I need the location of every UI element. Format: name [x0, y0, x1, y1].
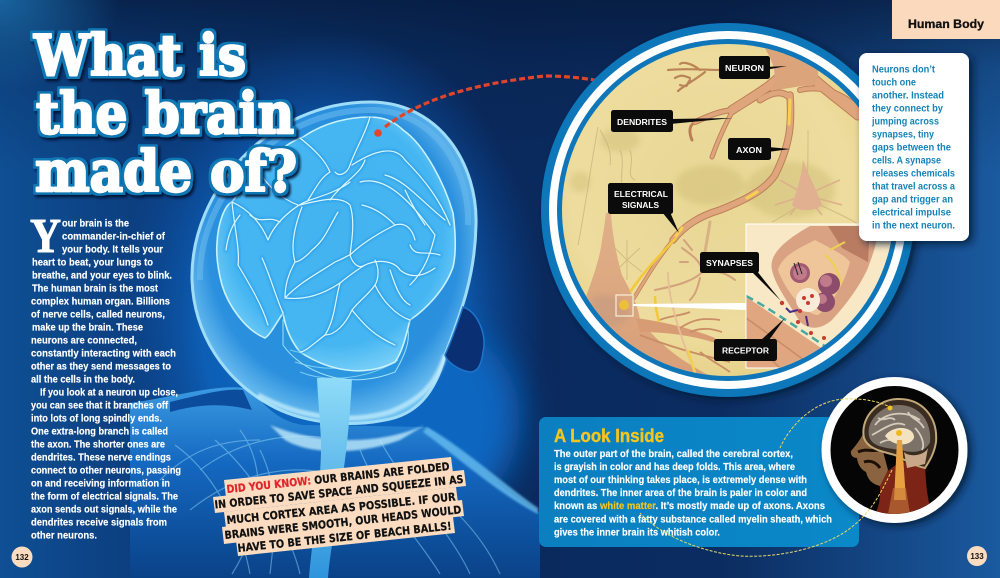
- callout line: receptor: RECEPTOR: [722, 346, 770, 356]
- neuron drawing: [570, 48, 891, 375]
- panel text: dendrites. The inner area of the brain is paler in color and: [554, 488, 807, 499]
- panel text: gives the inner brain its whitish color.: [554, 528, 720, 538]
- callout line: neuron: NEURON: [725, 63, 764, 73]
- body text: of nerve cells, called neurons,: [31, 310, 165, 320]
- body text: If you look at a neuron up close,: [40, 388, 178, 398]
- callout line: electrical signals: [608, 183, 679, 233]
- panel text: known as white matter. It’s mostly made up of axons. Axons: [554, 501, 825, 512]
- note: neurons don't touch: another. Instead: [872, 90, 944, 102]
- body text: into lots of long spindly ends.: [31, 414, 162, 424]
- note: neurons don't touch: in the next neuron.: [872, 220, 955, 232]
- did you know callout: IN ORDER TO SAVE SPACE AND SQUEEZE IN AS: [214, 473, 464, 511]
- body text: axon sends out signals, while the: [31, 504, 177, 516]
- yellow electrical signals: [630, 238, 676, 292]
- body text: complex human organ. Billions: [31, 296, 170, 308]
- body text: The human brain is the most: [32, 284, 159, 294]
- panel text: most of our thinking takes place, is extremely dense with: [554, 475, 807, 486]
- note: neurons don't touch: Neurons don’t: [872, 64, 936, 76]
- small neuron beside synapses: [655, 222, 740, 300]
- note: neurons don't touch: synapses, tiny: [872, 130, 934, 140]
- illustration: glowing blue head and brain: [115, 30, 545, 578]
- callout line: electrical signals: ELECTRICAL: [614, 189, 668, 199]
- body text: on and receiving information in: [31, 478, 170, 490]
- note: neurons don't touch: they connect by: [872, 104, 943, 114]
- body text: commander-in-chief of: [62, 232, 166, 242]
- face profile: [851, 432, 888, 486]
- brain folds shading and highlights: [226, 117, 450, 352]
- callout line: axon: AXON: [736, 145, 762, 155]
- brain cerebrum: [217, 117, 455, 371]
- panel heading: A Look Inside: [554, 426, 664, 446]
- head cross-section circle: [822, 377, 968, 523]
- body text: dendrites. These nerve endings: [31, 452, 171, 464]
- body text: [30, 208, 181, 542]
- panel text: The outer part of the brain, called the cerebral cortex,: [554, 449, 793, 460]
- curly dendrite ends: [640, 312, 730, 372]
- page number 132: [12, 546, 32, 568]
- body text: the axon. The shorter ones are: [31, 440, 165, 450]
- callout line: dendrites: [611, 110, 733, 132]
- did you know callout: BRAINS WERE SMOOTH, OUR HEADS WOULD: [224, 503, 462, 542]
- panel text: [554, 449, 832, 538]
- title: [33, 23, 297, 205]
- skull: [192, 102, 476, 424]
- title: made of?: [35, 139, 297, 205]
- note: neurons don't touch: releases chemicals: [872, 168, 955, 180]
- skull and brain: [863, 399, 936, 468]
- section tab: Human Body: Human Body: [908, 17, 984, 31]
- callout line: neuron: [719, 56, 787, 79]
- small neuron right of axon: [775, 180, 842, 215]
- note: neurons don't touch: jumping across: [871, 116, 939, 128]
- did you know callout: DID YOU KNOW: OUR BRAINS ARE FOLDED: [226, 460, 450, 496]
- body text: neurons are connected,: [31, 336, 137, 346]
- note: neurons don't touch: [859, 53, 969, 241]
- neuron circle illustration: [541, 20, 915, 397]
- brain stem: [309, 378, 352, 578]
- body text: other as they send messages to: [31, 362, 171, 372]
- ear: [445, 307, 484, 372]
- note: neurons don't touch: touch one: [872, 78, 916, 88]
- callout line: receptor: [714, 318, 785, 361]
- callout line: synapses: SYNAPSES: [706, 258, 753, 268]
- body text: connect to other neurons, passing: [31, 466, 181, 476]
- body text: One extra-long branch is called: [31, 426, 168, 438]
- note: neurons don't touch: gap and trigger an: [872, 194, 953, 206]
- title: What is: [33, 23, 246, 89]
- note: neurons don't touch: electrical impulse: [872, 208, 951, 218]
- body text: your body. It tells your: [62, 244, 163, 256]
- page number 133: 133: [970, 552, 984, 561]
- page number 132: 132: [15, 553, 29, 562]
- cerebellum: [283, 320, 408, 380]
- torn paper strips: [213, 457, 466, 556]
- body text: you can see that it branches off: [31, 400, 169, 412]
- dashed yellow connector lines: [640, 399, 892, 556]
- section tab: Human Body: [892, 0, 1000, 39]
- body text: all the cells in the body.: [31, 374, 135, 386]
- body text: dendrites receive signals from: [31, 518, 167, 528]
- title: the brain: [36, 81, 294, 147]
- circle rings: [541, 23, 915, 397]
- panel text: are covered with a fatty substance called myelin sheath, which: [554, 514, 832, 526]
- callout line: axon: [728, 138, 790, 160]
- main neuron soma and dendrites: [634, 65, 858, 298]
- shoulders and neck: [130, 387, 540, 578]
- drop cap: Y: [30, 208, 61, 263]
- page number 133: [967, 546, 987, 566]
- body text: our brain is the: [62, 218, 129, 230]
- faint background neurons: [578, 127, 858, 280]
- body text: other neurons.: [31, 530, 97, 542]
- note: neurons don't touch: that travel across a: [872, 182, 955, 192]
- did you know callout: HAVE TO BE THE SIZE OF BEACH BALLS!: [237, 520, 452, 555]
- top-left dendrite cluster: [668, 63, 722, 91]
- neck and shoulders: [875, 462, 932, 514]
- body text: heart to beat, your lungs to: [32, 258, 153, 268]
- callout line: dendrites: DENDRITES: [617, 117, 667, 127]
- yellow pointer marker: [888, 406, 892, 410]
- lower left large neuron: [583, 213, 710, 380]
- body text: breathe, and your eyes to blink.: [32, 270, 172, 282]
- callout line: synapses: [700, 252, 781, 301]
- did you know callout: MUCH CORTEX AREA AS POSSIBLE. IF OUR: [226, 490, 457, 527]
- callout line: electrical signals: SIGNALS: [622, 200, 659, 210]
- body text: the form of electrical signals. The: [31, 492, 178, 502]
- body text: make up the brain. These: [32, 322, 143, 334]
- did you know callout: [213, 457, 466, 556]
- inset synapse panel: [746, 224, 891, 368]
- red dashed pointer arrow: [374, 76, 642, 137]
- note: neurons don't touch: cells. A synapse: [872, 156, 941, 166]
- note: neurons don't touch: gaps between the: [872, 142, 951, 154]
- body text: constantly interacting with each: [31, 348, 176, 360]
- panel text: is grayish in color and has deep folds. This area, where: [554, 462, 795, 473]
- panel: a look inside: [539, 417, 859, 547]
